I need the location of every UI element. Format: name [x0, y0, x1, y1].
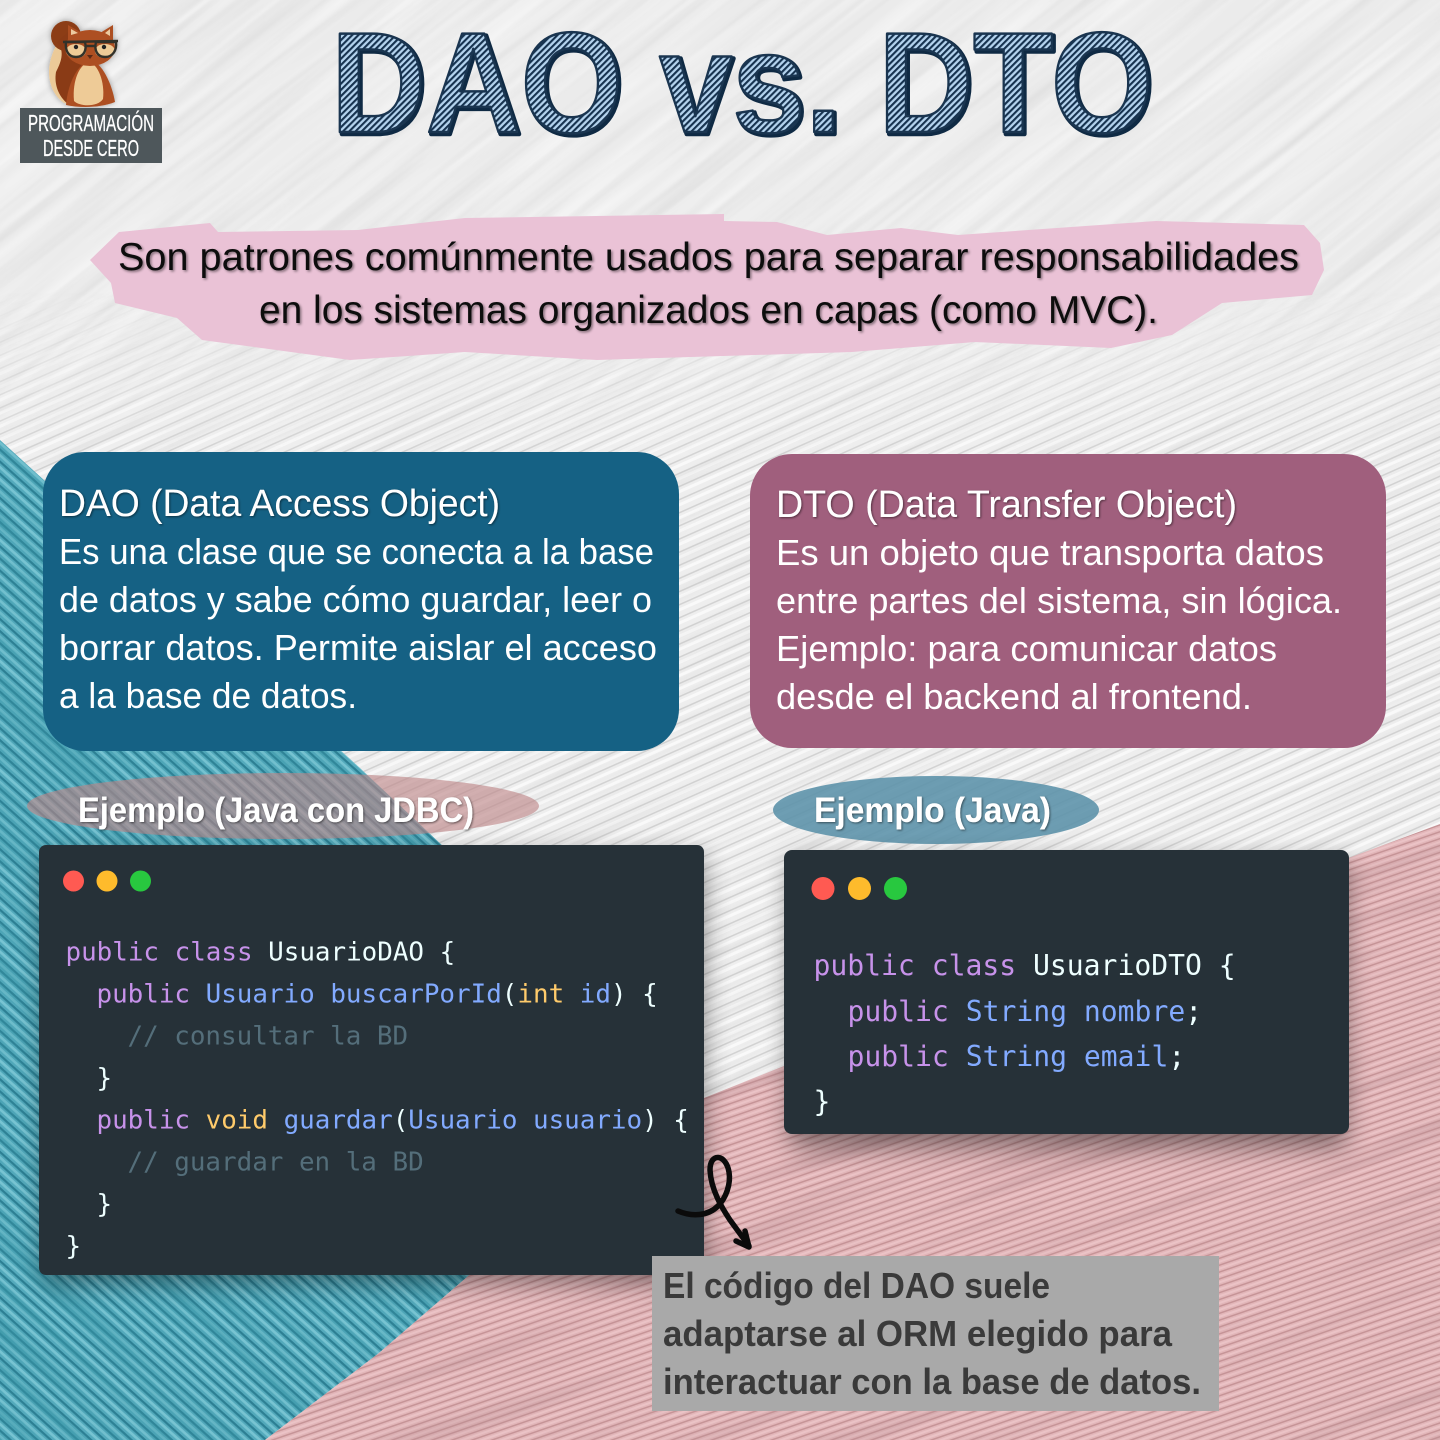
text block: DTO description: desde el backend al frontend. [776, 676, 1252, 717]
callout: ORM note: interactuar con la base de datos. [663, 1361, 1201, 1402]
panel: DTO definition [750, 454, 1386, 748]
text block: DTO description: Ejemplo: para comunicar datos [776, 628, 1277, 669]
logo: squirrel with glasses and brand label: PROGRAMACIÓN [28, 110, 154, 136]
code window: UsuarioDTO: public String nombre; [848, 995, 1202, 1028]
background: white textured wall [0, 0, 1440, 1094]
text block: DTO description: Es un objeto que transporta datos [776, 532, 1324, 573]
code window: UsuarioDAO: // consultar la BD [128, 1022, 408, 1052]
text block: DTO description: entre partes del sistema, sin lógica. [776, 580, 1342, 621]
text block: DTO description [776, 532, 1342, 717]
code window: UsuarioDAO: public void guardar(Usuario usuario) { [96, 1106, 689, 1136]
code window: UsuarioDAO: } [96, 1190, 112, 1220]
code window: UsuarioDTO: } [814, 1085, 830, 1118]
code window: UsuarioDTO: public String email; [848, 1040, 1185, 1073]
code window: UsuarioDTO: public class UsuarioDTO { [814, 949, 1236, 982]
title: DAO vs. DTO [331, 4, 1153, 163]
label: Ejemplo Java con JDBC: Ejemplo (Java con JDBC) [78, 791, 474, 830]
code window: UsuarioDAO: // guardar en la BD [128, 1148, 424, 1178]
code window: UsuarioDTO [784, 850, 1349, 1147]
label: Ejemplo Java [773, 776, 1099, 844]
code window: UsuarioDAO [39, 845, 704, 1282]
code window: UsuarioDAO: } [66, 1232, 81, 1262]
text block: DAO description: borrar datos. Permite aislar el acceso [59, 627, 657, 668]
callout: ORM note [652, 1256, 1219, 1411]
background: teal painted corner [0, 440, 469, 1440]
text block: DAO description: a la base de datos. [59, 675, 357, 716]
callout: ORM note: adaptarse al ORM elegido para [663, 1313, 1173, 1354]
background: pink painted corner [265, 824, 1440, 1440]
heading: DAO: DAO (Data Access Object) [59, 483, 500, 525]
code window: UsuarioDAO: public Usuario buscarPorId(int id) { [96, 980, 658, 1010]
text block: DAO description [59, 531, 657, 716]
logo: squirrel with glasses and brand label [20, 21, 162, 163]
title: DAO vs. DTO [333, 6, 1155, 165]
code window: UsuarioDAO: public class UsuarioDAO { [66, 938, 455, 968]
label: Ejemplo Java: Ejemplo (Java) [814, 791, 1051, 830]
logo: squirrel with glasses and brand label: DESDE CERO [43, 135, 139, 161]
text block: DAO description: Es una clase que se conecta a la base [59, 531, 654, 572]
code window: UsuarioDAO: } [96, 1064, 112, 1094]
intro banner: brush stroke with subtitle [90, 214, 1324, 360]
label: Ejemplo Java con JDBC [27, 773, 539, 839]
intro banner: brush stroke with subtitle: Son patrones comúnmente usados para separar responsabilidades [118, 236, 1299, 279]
intro banner: brush stroke with subtitle: en los sistemas organizados en capas (como MVC). [259, 289, 1158, 332]
heading: DTO: DTO (Data Transfer Object) [776, 484, 1237, 526]
text block: DAO description: de datos y sabe cómo guardar, leer o [59, 579, 652, 620]
callout: ORM note: El código del DAO suele [663, 1265, 1050, 1306]
arrow: loop pointing to note [678, 1157, 749, 1247]
panel: DAO definition [43, 452, 679, 751]
